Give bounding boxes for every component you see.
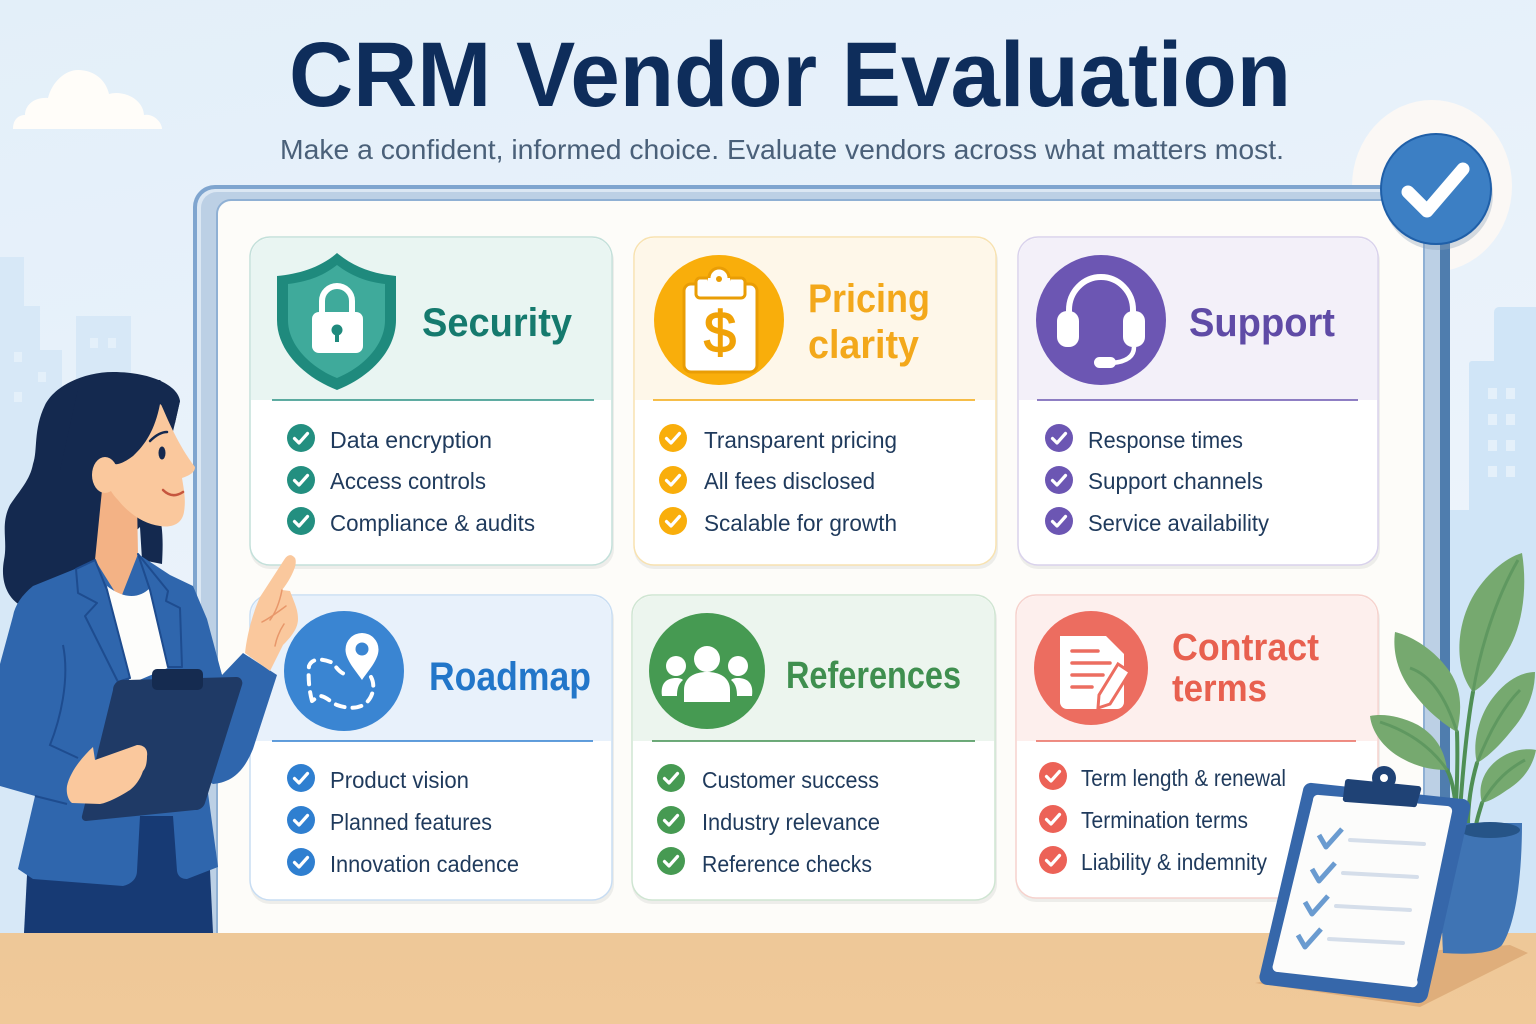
hair <box>3 372 180 605</box>
checklist: Product vision <box>330 767 469 793</box>
panel: pricing clarity: clarity <box>808 323 920 367</box>
plant <box>1370 553 1536 954</box>
heading: Support <box>1189 301 1335 345</box>
title: CRM Vendor Evaluation <box>289 24 1291 126</box>
checklist: Response times <box>1088 427 1243 453</box>
blazer <box>0 554 222 886</box>
woman with clipboard <box>0 372 298 933</box>
mouth <box>163 490 183 495</box>
checklist: Industry relevance <box>702 809 880 835</box>
pot <box>1442 823 1522 954</box>
heading: References <box>786 655 961 697</box>
leaves <box>1370 553 1536 803</box>
pointing hand <box>245 555 298 671</box>
icon: people <box>649 613 765 729</box>
panel: contract terms <box>1016 595 1380 902</box>
checklist: Termination terms <box>1081 807 1248 833</box>
panel: contract terms: terms <box>1172 668 1267 710</box>
checklist: Transparent pricing <box>704 427 897 453</box>
shirt <box>107 586 170 684</box>
clipboard clip <box>152 669 203 690</box>
checklist: Access controls <box>330 468 486 494</box>
clipboard foreground <box>1259 766 1470 1003</box>
checklist: Innovation cadence <box>330 851 519 877</box>
clipboard held <box>82 677 242 821</box>
neck <box>95 470 150 596</box>
checklist <box>657 764 880 877</box>
checklist <box>1039 762 1286 875</box>
leaf veins <box>1380 560 1525 803</box>
checklist: Compliance & audits <box>330 510 535 536</box>
eyebrow <box>150 432 167 441</box>
stems <box>1447 692 1482 825</box>
heading: Roadmap <box>429 655 591 699</box>
heading: Contract <box>1172 627 1319 669</box>
checklist <box>1045 424 1269 536</box>
checklist: Scalable for growth <box>704 510 897 536</box>
checklist: Term length & renewal <box>1081 765 1286 791</box>
finger detail <box>262 590 286 646</box>
right lapel <box>138 554 182 667</box>
desk <box>0 933 1536 1024</box>
icon: verified badge <box>1381 134 1493 250</box>
checklist: All fees disclosed <box>704 468 875 494</box>
checklist: Support channels <box>1088 468 1263 494</box>
badge halo <box>1352 100 1512 272</box>
board frame <box>193 185 1450 955</box>
heading: Pricing <box>808 277 930 321</box>
checklist <box>287 424 535 536</box>
desk shadow <box>1255 945 1528 1007</box>
checklist: Service availability <box>1088 510 1269 536</box>
city skyline left <box>0 257 131 933</box>
checklist: Data encryption <box>330 427 492 453</box>
board surface <box>217 200 1424 952</box>
icon: shield <box>277 253 396 390</box>
heading: Security <box>422 301 573 345</box>
panel: roadmap <box>250 595 614 904</box>
panel: pricing clarity <box>634 237 998 569</box>
checklist: Planned features <box>330 809 492 835</box>
hand holding <box>67 745 147 804</box>
cloud <box>13 70 162 129</box>
face <box>100 402 195 526</box>
panel: security <box>250 237 614 569</box>
checklist: Liability & indemnity <box>1081 849 1267 875</box>
icon: price clipboard <box>654 255 784 385</box>
icon: document and pen <box>1034 611 1148 725</box>
subtitle: Make a confident, informed choice. Evaluate vendors across what matters most. <box>280 134 1284 165</box>
panel: support <box>1018 237 1380 569</box>
left lapel <box>76 560 130 682</box>
ear <box>92 457 118 493</box>
checklist: Reference checks <box>702 851 872 877</box>
icon: map pin <box>284 611 404 731</box>
hair front <box>60 380 180 470</box>
panel: references <box>632 595 997 904</box>
icon: headset <box>1036 255 1166 385</box>
checklist: Customer success <box>702 767 879 793</box>
checklist <box>659 424 897 536</box>
right sleeve <box>190 620 277 784</box>
icon: price clipboard: $ <box>704 300 736 365</box>
arm fold <box>35 645 78 804</box>
city skyline right <box>1450 307 1536 933</box>
trousers <box>24 800 213 933</box>
checklist <box>287 764 519 877</box>
eye <box>158 446 166 460</box>
